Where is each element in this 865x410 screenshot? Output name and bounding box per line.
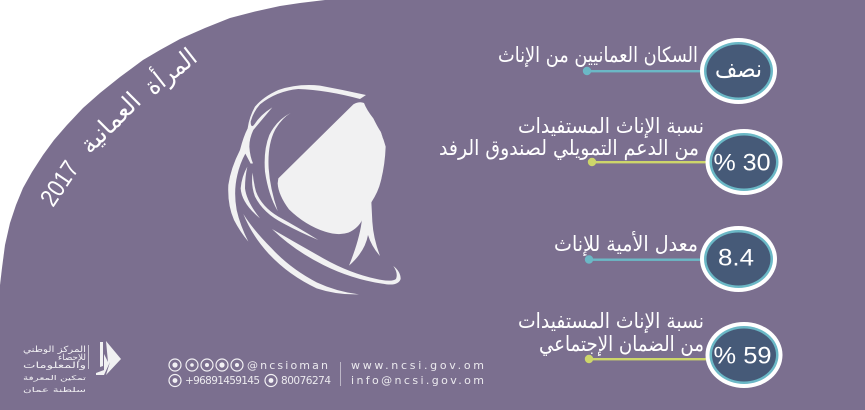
title: العمانية: [74, 86, 147, 159]
stat row 1: [498, 38, 777, 104]
badge: 30 percent: [706, 129, 782, 195]
logo text: والمعلومات: [23, 361, 86, 371]
badge: half: نصف: [715, 55, 762, 83]
logo mark: [96, 341, 121, 375]
handle: @ncsioman: [247, 359, 331, 372]
badge: 8.4: 8.4: [718, 244, 754, 272]
label: social security: نسبة الإناث المستفيدات: [518, 309, 704, 333]
logo: NCSI: [23, 341, 121, 394]
logo divider: [88, 345, 89, 369]
badge: half: [700, 38, 777, 104]
connector line 2: [588, 158, 708, 166]
logo text: [23, 345, 86, 394]
badge: 59 percent: % 59: [714, 342, 772, 370]
badge: 59 percent: [706, 322, 782, 388]
label: illiteracy: معدل الأمية للإناث: [554, 231, 698, 256]
connector line 1: [583, 67, 702, 75]
stat row 2: من الدعم التمويلي لصندوق الرفد: [439, 136, 699, 161]
connector line 4: [585, 355, 708, 363]
footer contacts: [169, 359, 484, 387]
stat row 3: [554, 226, 777, 292]
label: financing support: نسبة الإناث المستفيدات: [518, 114, 704, 138]
footer divider: [340, 362, 341, 386]
email: info@ncsi.gov.om: [351, 374, 484, 387]
logo text: للإحصاء: [58, 353, 86, 363]
stat row 2: [439, 114, 782, 195]
title: [35, 40, 202, 211]
title: 2017: [35, 156, 85, 211]
stat row 4: [518, 309, 782, 388]
social icons: [169, 359, 277, 386]
badge: 8.4: [700, 226, 777, 292]
logo text: تمكين المعرفة: [23, 374, 86, 382]
website: www.ncsi.gov.om: [351, 359, 484, 372]
connector line 3: [585, 255, 702, 264]
logo text: سلطنة عمان: [23, 386, 86, 394]
label: population: السكان العمانيين من الإناث: [498, 43, 698, 67]
stat row 4: من الضمان الإجتماعي: [539, 332, 704, 356]
badge: 30 percent: % 30: [714, 150, 770, 176]
icon: woman with headscarf: [228, 85, 401, 294]
logo text: المركز الوطني: [23, 345, 86, 355]
phone numbers: +96891459145: [185, 375, 260, 387]
title: المرأة: [137, 40, 202, 101]
footer contacts: 80076274: [281, 375, 331, 387]
